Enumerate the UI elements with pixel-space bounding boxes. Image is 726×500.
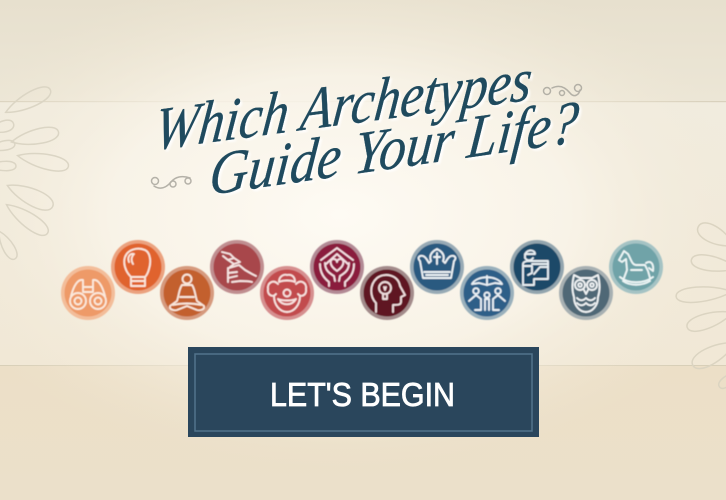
icon: rocking horse bbox=[609, 240, 663, 294]
title bbox=[151, 46, 582, 209]
flourish: top right bbox=[544, 84, 582, 96]
icon: crown bbox=[410, 240, 464, 294]
icon: head with lightbulb bbox=[360, 266, 414, 320]
right petal ornament bbox=[675, 219, 726, 391]
button: let's begin: LET'S BEGIN bbox=[270, 376, 455, 413]
title line 1: Which Archetypes bbox=[151, 46, 536, 164]
icon: person with shield bbox=[510, 240, 564, 294]
left petal ornament bbox=[0, 83, 70, 262]
icon: boxing glove bbox=[111, 240, 165, 294]
button: let's begin bbox=[188, 347, 539, 437]
icon: hands holding heart bbox=[310, 240, 364, 294]
icon: hands reaching bbox=[210, 240, 264, 294]
icon: meditating figure bbox=[160, 266, 214, 320]
flourish: bottom left bbox=[152, 177, 191, 188]
title line 2: Guide Your Life? bbox=[207, 88, 582, 209]
archetype icon row bbox=[61, 240, 663, 320]
icon: owl bbox=[559, 266, 613, 320]
icon: clown face bbox=[260, 266, 314, 320]
icon: family under umbrella bbox=[460, 266, 514, 320]
icon: binoculars bbox=[61, 266, 115, 320]
